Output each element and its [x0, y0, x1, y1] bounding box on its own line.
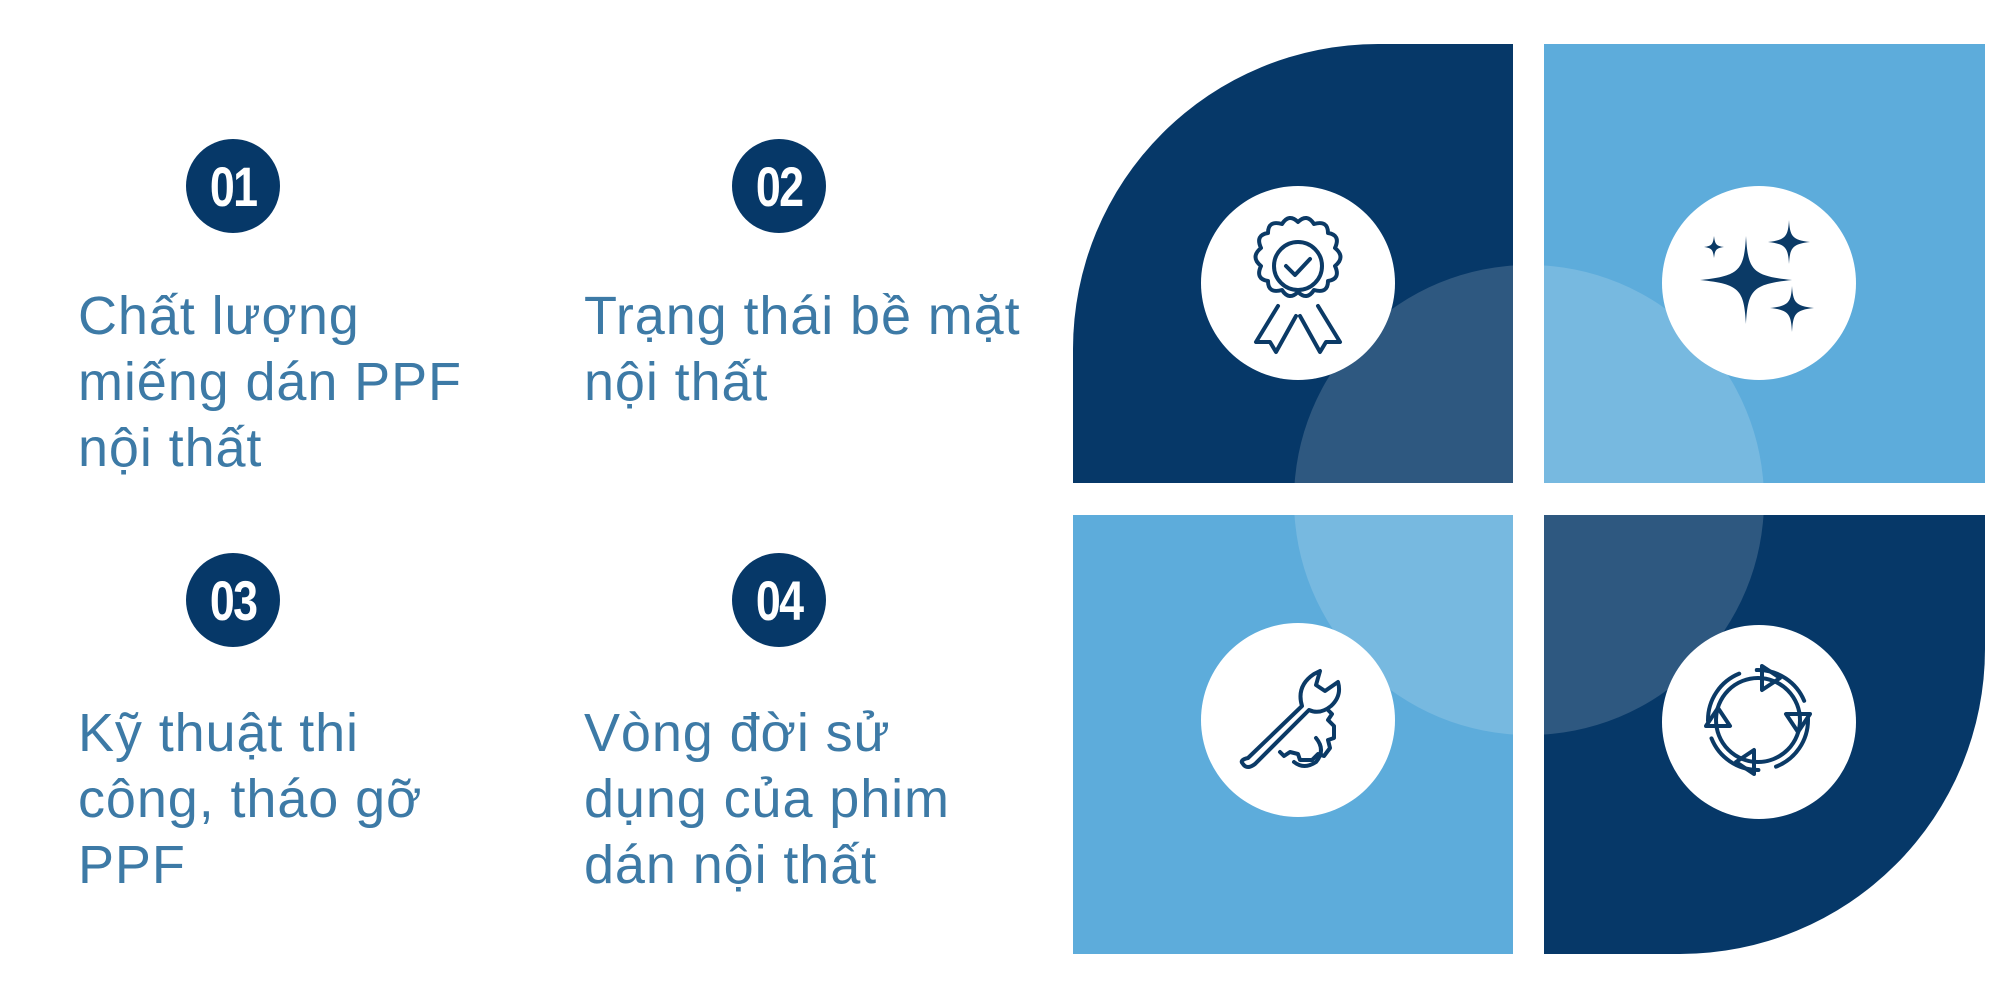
panel: top-left — [1073, 44, 1513, 483]
text 01: miếng dán PPF — [78, 352, 462, 412]
text 01 — [78, 286, 462, 478]
text 03: công, tháo gỡ — [78, 769, 422, 829]
panel: top-right — [1544, 44, 1985, 483]
icon: wrench and gear — [1201, 623, 1395, 817]
text 01: Chất lượng — [78, 286, 360, 346]
icon: award badge — [1201, 186, 1395, 380]
text 04: Vòng đời sử — [584, 703, 891, 763]
badge 02 — [732, 139, 826, 233]
text 01: nội thất — [78, 418, 262, 478]
badge 02: 02 — [756, 154, 802, 218]
text 02: nội thất — [584, 352, 768, 412]
text 04: dán nội thất — [584, 835, 877, 895]
text 04 — [584, 703, 950, 895]
badge 04 — [732, 553, 826, 647]
panel: bottom-right — [1544, 515, 1985, 954]
badge 01 — [186, 139, 280, 233]
text 03: PPF — [78, 835, 186, 895]
text 03 — [78, 703, 422, 895]
text 03: Kỹ thuật thi — [78, 703, 359, 763]
text 02: Trạng thái bề mặt — [584, 286, 1021, 346]
badge 04: 04 — [756, 568, 802, 632]
text 02 — [584, 286, 1021, 412]
center overlay circle — [1294, 265, 1764, 735]
badge 01: 01 — [210, 154, 256, 218]
panel: bottom-left — [1073, 515, 1513, 954]
quadrant graphic — [1073, 44, 1985, 954]
text 04: dụng của phim — [584, 769, 950, 829]
badge 03 — [186, 553, 280, 647]
badge 03: 03 — [210, 568, 256, 632]
icon: sparkles — [1662, 186, 1856, 380]
icon: cycle arrows — [1662, 625, 1856, 819]
